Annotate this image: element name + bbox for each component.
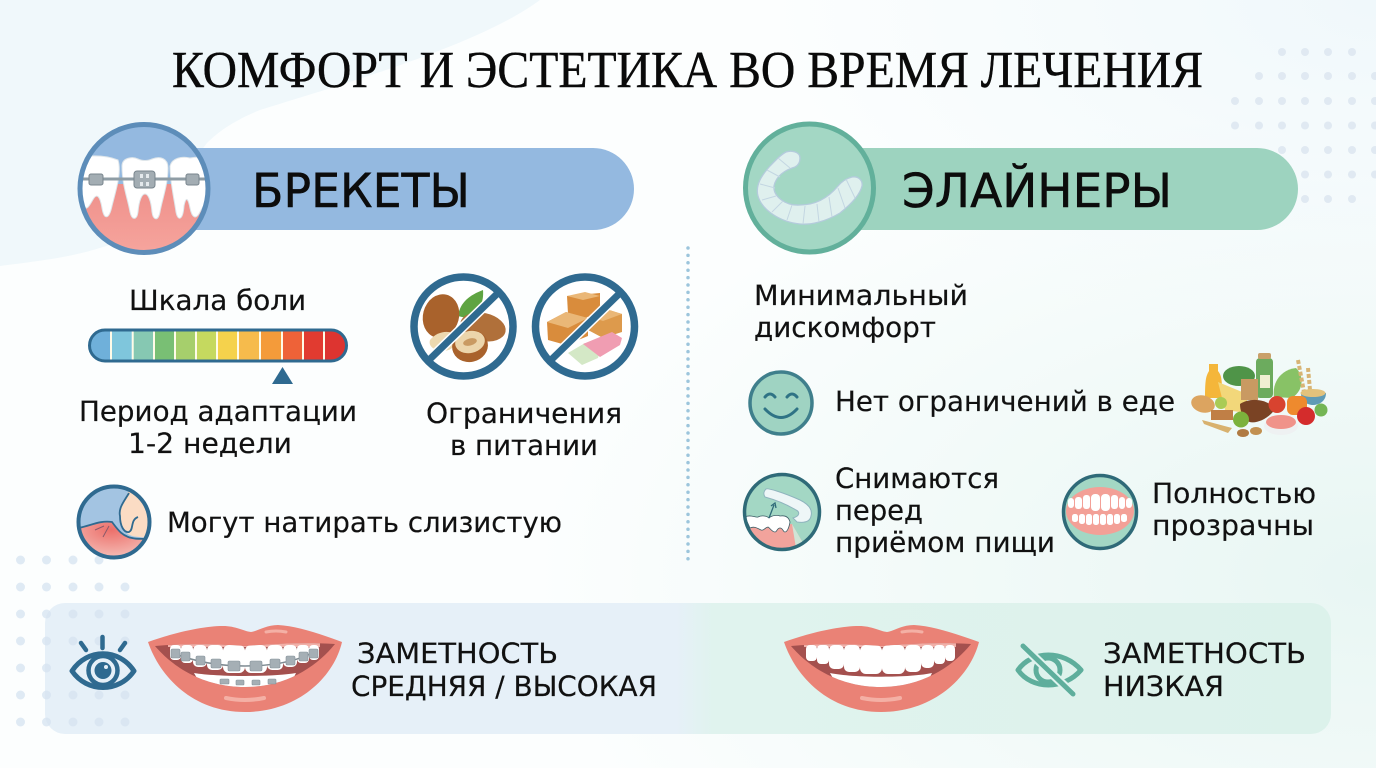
minimal discomfort: Минимальный [754,279,968,312]
icon: no nuts [414,277,513,376]
food restrictions: Ограничения [426,397,622,430]
removable text: приёмом пищи [835,526,1055,559]
no food restrictions text: Нет ограничений в еде [835,385,1175,418]
panel: visibility aligners [784,625,1306,712]
removable text [835,462,1055,559]
transparency text: Полностью [1152,477,1316,510]
food restrictions: в питании [450,429,598,462]
visibility aligners text: НИЗКАЯ [1103,670,1224,703]
removable text: перед [835,494,923,527]
icon: mucosa irritation [78,480,152,562]
braces pill [144,148,634,230]
adaptation period: Период адаптации [79,395,357,428]
transparency text: прозрачны [1152,509,1314,542]
icon: aligner tray [746,124,874,252]
transparency text [1152,477,1316,542]
icon: remove aligners [744,474,820,550]
icon: smile [750,372,812,434]
visibility aligners text: ЗАМЕТНОСТЬ [1103,637,1306,670]
pain scale marker [272,367,293,384]
adaptation period [79,395,357,460]
icon: teeth with braces [78,122,210,255]
visibility braces text: ЗАМЕТНОСТЬ [357,637,558,670]
aligners pill [810,148,1298,230]
panel: aligners header [746,124,1298,252]
panel: braces details [78,277,634,562]
adaptation period: 1-2 недели [128,427,292,460]
icon: food pile [1189,353,1328,437]
divider [686,248,690,566]
decorative dots top right [1231,48,1376,203]
pain scale label: Шкала боли [129,284,306,317]
removable text: Снимаются [835,462,999,495]
lips with braces [148,625,342,712]
panel: aligners details [744,279,1328,559]
icon: clear teeth [1064,476,1136,548]
pain scale bar [88,328,348,363]
braces heading: БРЕКЕТЫ [252,164,470,219]
title: КОМФОРТ И ЭСТЕТИКА ВО ВРЕМЯ ЛЕЧЕНИЯ [172,42,1203,99]
panel: braces header [70,124,634,260]
bottom comparison band [45,603,1331,734]
minimal discomfort: дискомфорт [754,311,936,344]
icon: crossed eye [1018,646,1081,694]
panel: visibility braces [72,625,657,712]
icon: no sweets [536,277,634,376]
visibility braces text [351,637,657,703]
lips with clean teeth [784,625,979,712]
visibility braces text: СРЕДНЯЯ / ВЫСОКАЯ [351,670,657,703]
icon: eye [72,637,134,688]
irritation text: Могут натирать слизистую [167,506,562,539]
decorative dots bottom left [16,556,130,726]
food restrictions [426,397,622,462]
minimal discomfort [754,279,968,344]
aligners heading: ЭЛАЙНЕРЫ [902,163,1172,219]
visibility aligners text [1103,637,1306,703]
